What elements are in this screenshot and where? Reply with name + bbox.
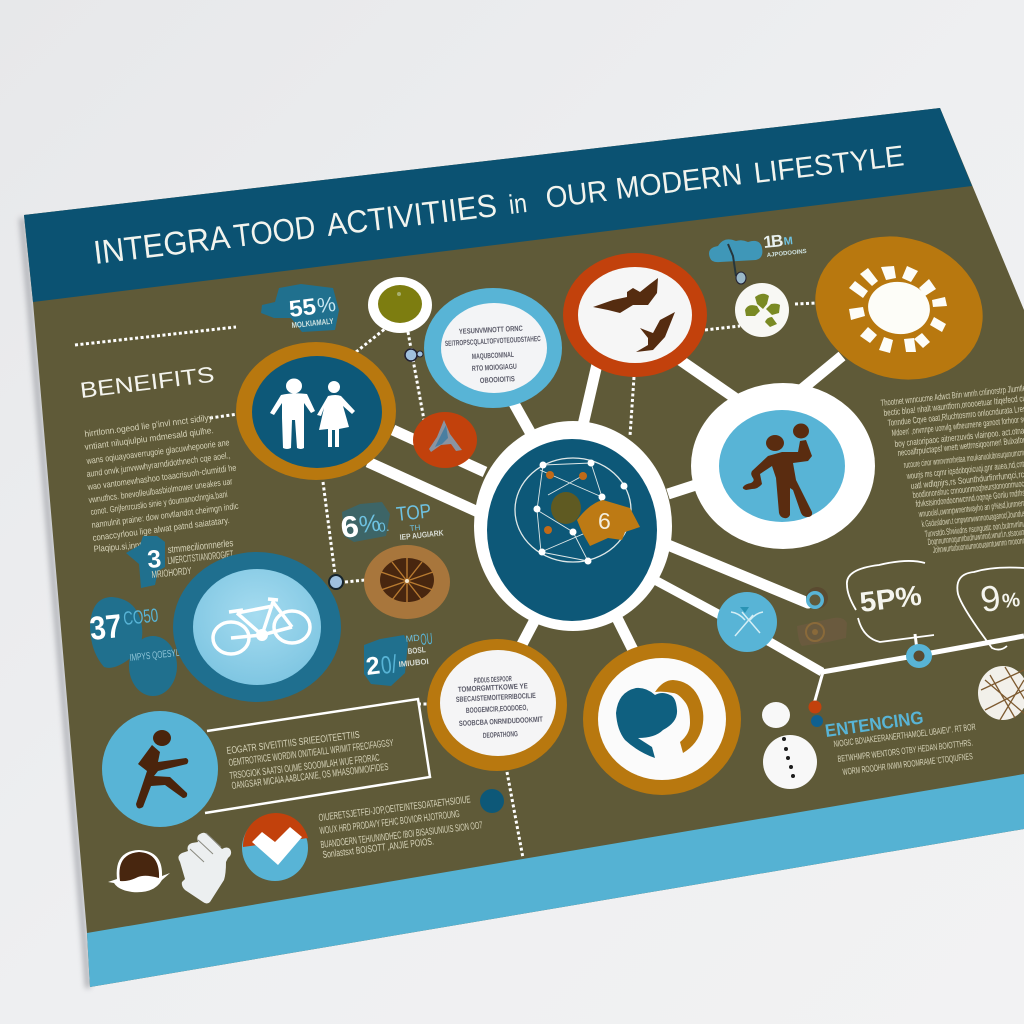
panel: lower text circle — [427, 639, 567, 771]
connector node — [405, 349, 423, 361]
stat: 6%: IEP AUGIARK — [399, 528, 444, 542]
panel: text circle: SEITROPSCQLALTOFVOTEOUDSTAHEC — [445, 334, 541, 348]
stat: 55%: % — [316, 293, 337, 318]
icon: cloud stat — [709, 231, 807, 284]
icon: lower-left runner circle — [102, 711, 218, 827]
female figure — [317, 381, 355, 447]
dots — [808, 700, 823, 727]
icon: pen circle — [717, 592, 777, 652]
panel: text circle: MAQUBCONINAL — [472, 350, 514, 361]
footer band — [87, 774, 1024, 987]
text block: lower middle — [318, 794, 483, 861]
heading: benefits: BENEIFITS — [79, 362, 216, 403]
text block: entencing — [833, 722, 976, 777]
stat: 37%: 37 — [88, 607, 124, 647]
stat: 3: 3 — [146, 545, 162, 574]
stat: 6% — [339, 500, 444, 545]
stat: 20%: 0/ — [379, 650, 399, 680]
network diagram — [515, 458, 631, 562]
panel: lower text circle: DEOPATHONG — [483, 729, 518, 740]
text box: lower left: TRSOGIOK SAATSI OUME SOOOMLAH WUE FRORAC — [229, 753, 380, 782]
icon: white dots figure — [762, 702, 817, 789]
stat: 3: MRIOHORDY — [151, 566, 192, 581]
stat: 6%: TH — [409, 523, 421, 533]
icon: leaf circle — [735, 283, 789, 337]
icon: red heart circle — [242, 813, 308, 881]
stat: 9%: 9 — [978, 577, 1003, 620]
stat: 6%: % — [357, 510, 382, 539]
panel: lower text circle: SOOBCBA ONRNIDUDOOKMIT — [459, 715, 543, 728]
stat: 20% — [364, 631, 433, 686]
stat: 55% — [261, 284, 339, 332]
stat: 3: stmmecilionnnerles — [167, 538, 234, 556]
title: OUR — [544, 175, 609, 215]
text block: benefits: vntiant niluqiulpiu mdmesald qiulhe. — [84, 425, 214, 452]
icon: heart circle — [583, 643, 741, 795]
stat: 9%: % — [1001, 589, 1021, 613]
title: TOOD — [232, 208, 317, 254]
text block: benefits: wao vantomewhashoo toaacrisuoh-clumitdi he — [86, 462, 237, 492]
panel: text circle — [424, 288, 562, 408]
text box: lower left: EOGATR SIVEITITIIS SRIEEOITEETTIIS — [226, 730, 361, 757]
icon: cloud stat: 1B — [762, 231, 784, 252]
icon: people circle — [236, 342, 396, 480]
icon: camera roll — [797, 618, 847, 646]
stat: 20%: MD — [405, 633, 421, 644]
stat: 20%: BOSL — [407, 645, 426, 656]
icon: bicycle circle — [173, 552, 341, 702]
connector node — [906, 644, 932, 668]
icon: hand — [178, 833, 231, 904]
panel: lower text circle: PIDDUS DESPOOR — [474, 674, 512, 685]
panel: lower text circle: BOOGEMCIR,EOODOEO, — [466, 703, 528, 715]
icon: birds circle — [563, 253, 707, 377]
text box: lower left — [205, 699, 430, 813]
icon: blue dot — [480, 789, 504, 813]
text block: benefits: vwnuthcs. bnevolleulbasbiolmower uneakes uar — [88, 476, 233, 505]
stat: 9% — [957, 568, 1024, 650]
title: INTEGRA — [91, 218, 232, 271]
icon: olive circle — [368, 277, 432, 333]
stat: 20%: IMIUBOI — [398, 657, 429, 669]
panel: lower text circle: SBECAISTEMOITERRIBOCILIE — [456, 691, 536, 704]
male figure — [270, 379, 315, 449]
connector node — [806, 587, 828, 609]
stat: 55%: MOLKIAMALY — [291, 317, 334, 330]
stat: 37%: CO50 — [122, 605, 159, 630]
text block: lower middle: OIUERETSJETFEI-JOP,OEITEINTESOATAETHSIOIUE — [318, 794, 471, 824]
title: LIFESTYLE — [752, 140, 906, 190]
stat: 6%: 6 — [339, 510, 361, 545]
stat: 3: LMERCITSTIANOROGIET — [167, 549, 234, 567]
icon: runner circle — [691, 383, 875, 549]
text block: lower middle: Sonlastsxt BOISOTT ,ANJIE POIOS. — [322, 836, 435, 861]
panel: text circle: OBOOIOITIS — [480, 374, 515, 385]
text block: benefits: conot. Gnjfenrcuslio sinie y doumanoclnrgia,bani — [90, 489, 228, 517]
text box: lower left: OANGSAR MICAIA AABLCANIE, OS MHASOMMOIFIDES — [231, 762, 389, 792]
stat: 6%: 0. — [378, 519, 390, 535]
header band — [24, 108, 972, 302]
stat: 6%: TOP — [395, 500, 432, 526]
title: in — [507, 188, 529, 220]
panel: central network hub — [474, 421, 672, 631]
stat: 5P% — [847, 561, 934, 642]
text block: benefits: nannulnit praine: dow onvtlandot cheimgn indic — [91, 501, 239, 530]
panel: central network hub: 6 — [598, 508, 611, 534]
text block: benefits: hirrtlonn.ogeod lie p'invl nnct sidilyy — [84, 412, 214, 439]
stat: 5P%: 5P% — [858, 580, 923, 618]
stat: 20%: OU — [420, 631, 433, 649]
icon: red small circle — [413, 412, 477, 468]
icon: dome — [108, 850, 170, 892]
panel: text circle: RTO MOIOGIAGU — [472, 362, 517, 373]
icon: cloud stat: M — [783, 235, 793, 248]
title — [91, 140, 906, 271]
panel: text circle: YESUNVMNOTT ORNC — [459, 324, 523, 336]
text block: benefits: aund onvk junvwwhyrarndidothnech cqe aoel., — [86, 450, 231, 479]
text block: right article — [880, 383, 1024, 555]
icon: wheel — [364, 545, 450, 619]
text block: benefits: wans oqiuayoaverrugoie glacuwhepoorie ane — [85, 437, 230, 466]
text block: lower middle: WOUX HRD PRODAVY FEHIC BOVIOR HJOTROUNG — [319, 809, 460, 837]
text box: lower left: OEMTROTRICE WORDIN ONITIEAILL WRIMIT FRECIFAGGSY — [228, 738, 394, 769]
icon: web ball — [978, 666, 1024, 720]
connector lines — [75, 303, 1024, 858]
connector node — [329, 575, 343, 589]
text block: benefits: Plaqipu.si,inptac — [93, 539, 150, 554]
text block: benefits: conaccyrloou lige alwat patnd saiatatary. — [92, 515, 230, 543]
stat: 55%: 55 — [287, 293, 318, 322]
stat: 3 — [126, 536, 234, 588]
stat: 37%: IMPYS QOESYL — [129, 648, 180, 664]
icon: cloud stat: AJPODOOINS — [767, 249, 807, 259]
heading: entencing: ENTENCING — [824, 707, 925, 741]
text block: benefits — [84, 412, 239, 554]
icon: sun circle — [797, 215, 1001, 401]
title: MODERN — [614, 158, 744, 206]
text block: lower middle: BUANDOERN TEHIUNINDHEC IBOI BISASIUNIUIS SION OO7 — [320, 820, 483, 851]
stat: 37% — [88, 597, 180, 696]
panel: lower text circle: TOMORGMTTKOWE YE — [458, 681, 528, 694]
stat: 20%: 2 — [364, 651, 382, 681]
title: ACTIVITIIES — [325, 187, 499, 243]
